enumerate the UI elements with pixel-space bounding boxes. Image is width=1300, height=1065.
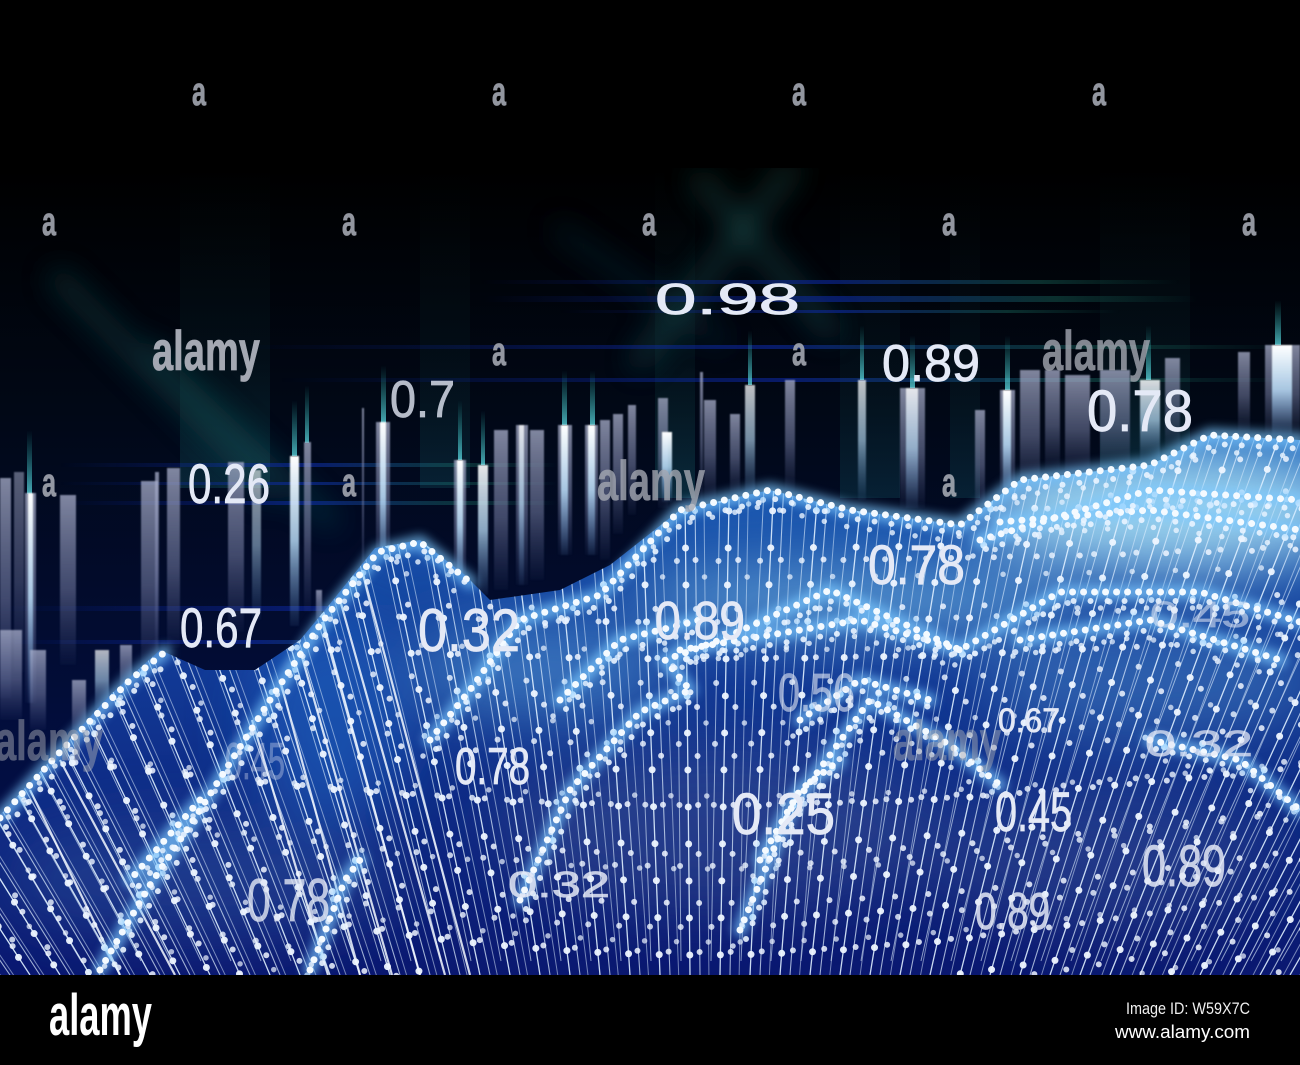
small watermark marks xyxy=(42,70,1256,505)
mesh base colour xyxy=(0,430,1300,975)
number 0.89 lower right: 0.89 xyxy=(1142,834,1226,899)
number 0.98: 0.98 xyxy=(655,275,800,324)
mesh highlight glows xyxy=(0,450,1300,940)
number 0.89 centre: 0.89 xyxy=(655,591,745,651)
footer: website: www.alamy.com xyxy=(1114,1022,1250,1042)
ridge dots offset row xyxy=(6,444,1300,979)
number 0.25: 0.25 xyxy=(732,782,835,847)
horizontal blue light bands xyxy=(0,280,1300,644)
large alamy watermarks: alamy xyxy=(152,319,260,382)
number 0.78 lower: 0.78 xyxy=(455,738,530,796)
background bar chart columns xyxy=(0,345,1300,740)
number 0.7: 0.7 xyxy=(390,371,455,429)
number 0.45 faint: 0.45 xyxy=(1150,594,1250,635)
number 0.32 right: 0.32 xyxy=(1145,723,1253,764)
large alamy watermarks xyxy=(0,319,1150,772)
small watermark marks: a xyxy=(342,200,356,244)
small watermark marks: a xyxy=(942,461,956,505)
number 0.56: 0.56 xyxy=(778,663,855,723)
number 0.89: 0.89 xyxy=(882,335,980,393)
teal light streaks and rays xyxy=(60,168,1190,520)
large alamy watermarks: alamy xyxy=(1042,319,1150,382)
small watermark marks: a xyxy=(192,70,206,114)
number 0.89 bottom: 0.89 xyxy=(975,883,1050,941)
small watermark marks: a xyxy=(792,330,806,374)
small watermark marks: a xyxy=(492,70,506,114)
number 0.67: 0.67 xyxy=(180,596,262,659)
number 0.45 faint left: 0.45 xyxy=(225,733,285,791)
small watermark marks: a xyxy=(42,461,56,505)
watermark overlay xyxy=(0,70,1256,772)
number 0.26: 0.26 xyxy=(188,452,270,515)
glowing dotted wave ridges xyxy=(0,435,1300,986)
small watermark marks: a xyxy=(342,461,356,505)
small watermark marks: a xyxy=(642,200,656,244)
wave mesh surface xyxy=(0,435,1300,975)
number 0.78 bottom left: 0.78 xyxy=(247,867,330,934)
number 0.32 bottom: 0.32 xyxy=(508,864,610,905)
floating data numbers xyxy=(180,275,1253,941)
number 0.78 centre right: 0.78 xyxy=(868,533,965,596)
footer: image id: Image ID: W59X7C xyxy=(1126,999,1250,1018)
number 0.45: 0.45 xyxy=(995,780,1072,843)
cyan flares above the bars xyxy=(27,300,1281,494)
number 0.67 small: 0.67 xyxy=(998,702,1060,740)
ridge dots third row xyxy=(0,451,1293,986)
ridge glow xyxy=(0,435,1300,970)
fibre lines xyxy=(0,386,1300,983)
small watermark marks: a xyxy=(942,200,956,244)
ridge dots main row xyxy=(0,435,1300,970)
footer: alamy logo: alamy xyxy=(49,983,152,1048)
number 0.32: 0.32 xyxy=(418,597,520,664)
bright left fibre strands xyxy=(30,570,470,975)
small watermark marks: a xyxy=(42,200,56,244)
large alamy watermarks: alamy xyxy=(597,449,705,512)
dots on fibre lines xyxy=(0,435,1300,975)
number 0.78: 0.78 xyxy=(1087,379,1193,444)
small watermark marks: a xyxy=(1092,70,1106,114)
small watermark marks: a xyxy=(792,70,806,114)
small watermark marks: a xyxy=(1242,200,1256,244)
small watermark marks: a xyxy=(492,330,506,374)
large alamy watermarks: alamy xyxy=(893,709,1001,772)
